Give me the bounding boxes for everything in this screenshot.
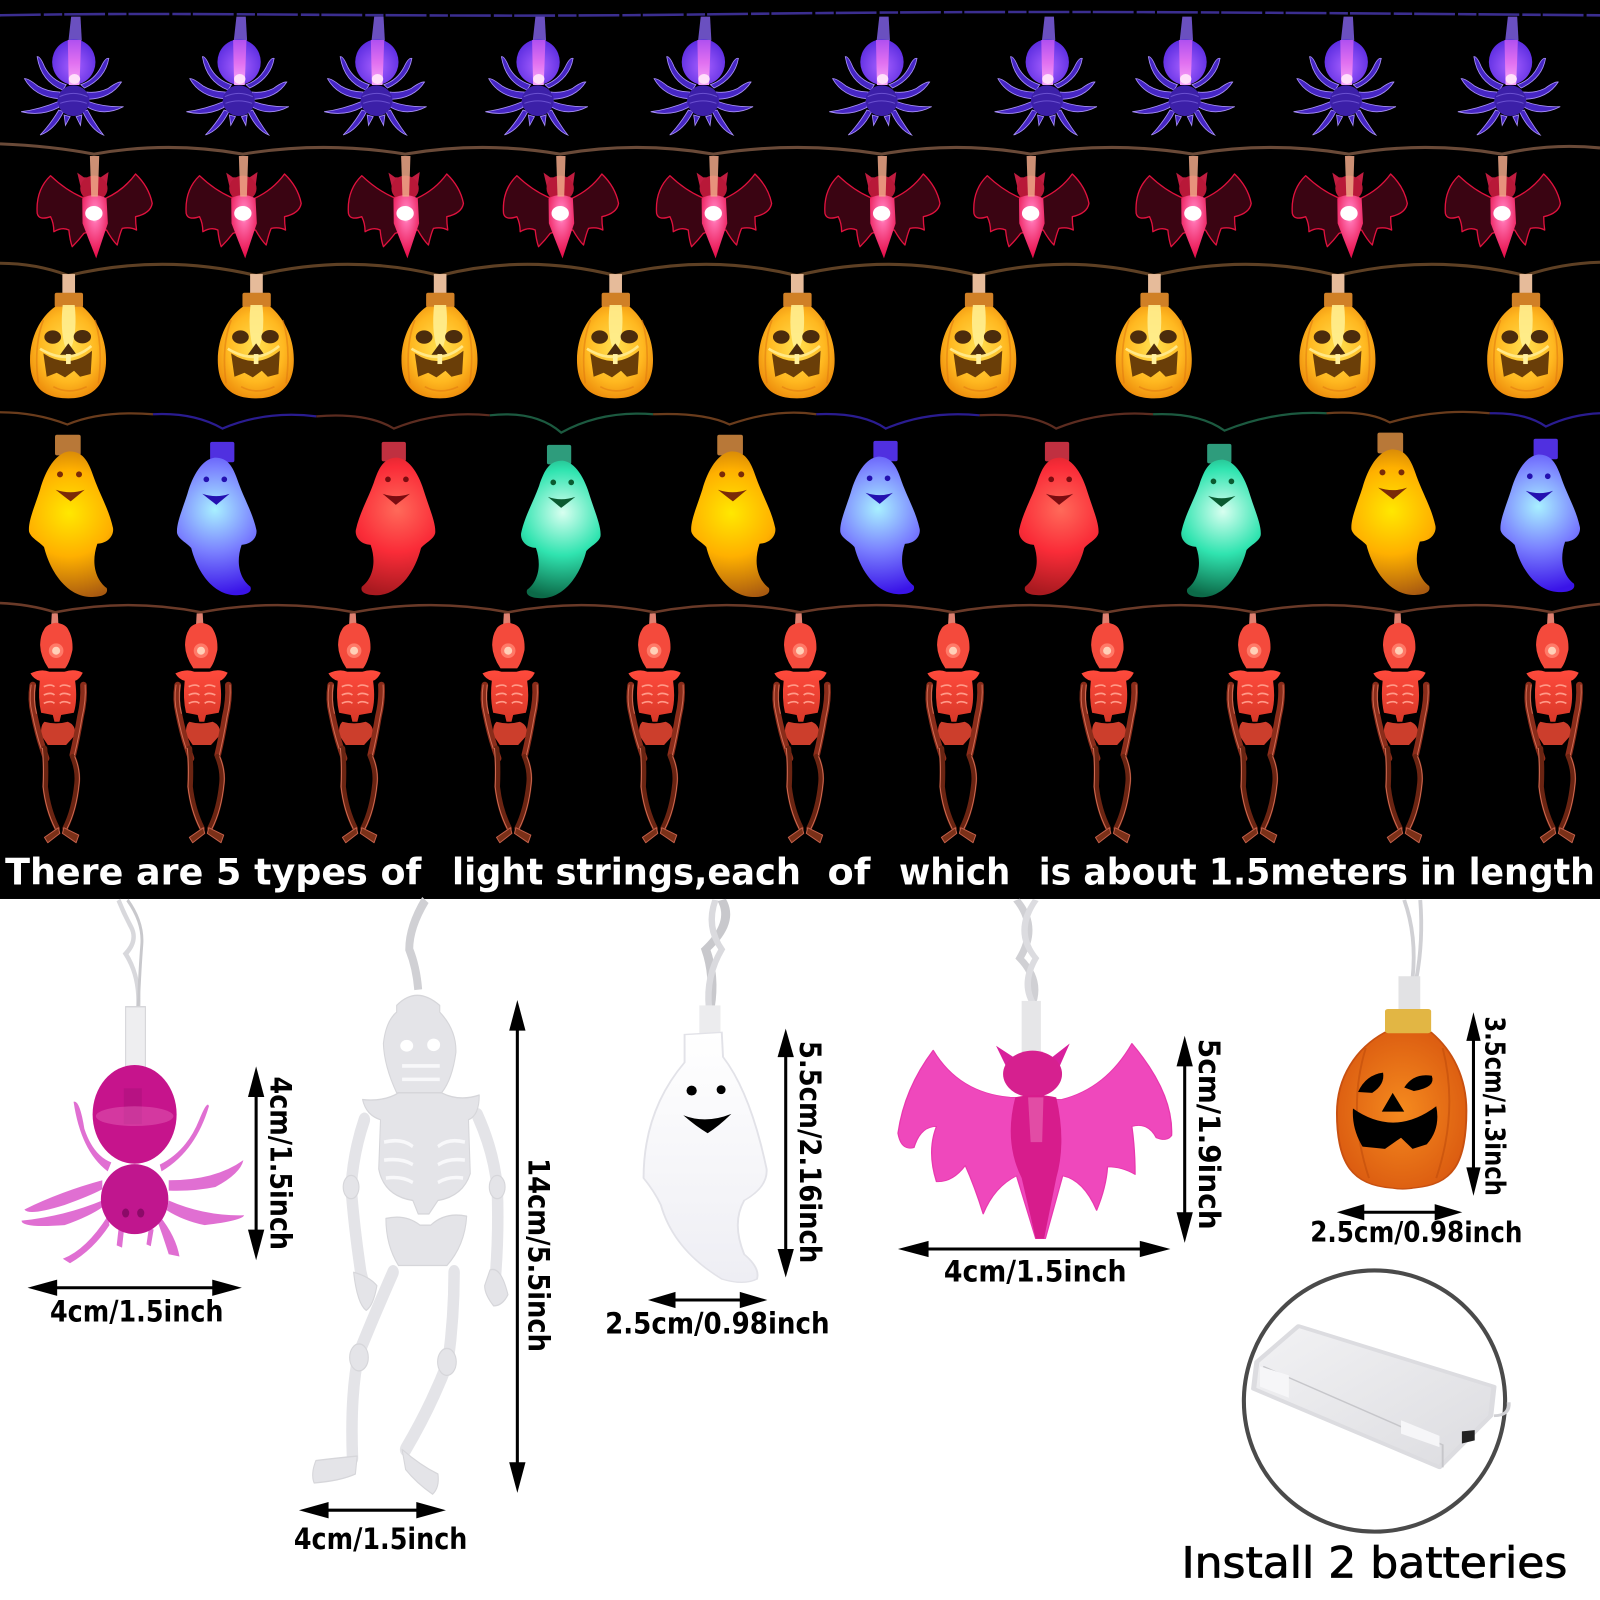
arrow: ghost width xyxy=(648,1292,767,1308)
row: purple spider string xyxy=(0,12,1600,135)
caption: There are 5 types of xyxy=(5,851,422,894)
arrow: pumpkin height xyxy=(1466,1012,1481,1196)
label: pumpkin width: 2.5cm/0.98inch xyxy=(1310,1215,1522,1249)
row: red skeleton string xyxy=(0,603,1600,843)
caption: light strings,each xyxy=(452,851,801,894)
label: pumpkin height: 3.5cm/1.3inch xyxy=(1479,1016,1511,1196)
product: pink spider xyxy=(22,900,244,1263)
row: orange pumpkin string xyxy=(0,262,1600,398)
label: spider width: 4cm/1.5inch xyxy=(50,1294,223,1328)
label: bat width: 4cm/1.5inch xyxy=(944,1255,1127,1289)
caption xyxy=(5,851,1595,894)
arrow: ghost height xyxy=(778,1029,794,1278)
product: pink bat xyxy=(898,900,1172,1239)
caption: which xyxy=(899,851,1010,894)
arrow: skeleton height xyxy=(509,1000,526,1493)
product: white ghost xyxy=(644,900,767,1282)
label: bat height: 5cm/1.9inch xyxy=(1192,1039,1226,1230)
arrow: bat width xyxy=(898,1241,1170,1257)
label: ghost height: 5.5cm/2.16inch xyxy=(793,1041,827,1263)
panel: black lit-up light strings xyxy=(0,0,1600,899)
arrow: spider width xyxy=(28,1280,242,1296)
arrow: bat height xyxy=(1177,1036,1193,1243)
product: orange pumpkin xyxy=(1337,900,1466,1189)
row: red bat string xyxy=(0,144,1600,258)
label: ghost width: 2.5cm/0.98inch xyxy=(605,1307,830,1341)
row: multicolour ghost string xyxy=(0,412,1600,598)
battery box callout xyxy=(1244,1270,1509,1532)
label: spider height: 4cm/1.5inch xyxy=(263,1077,297,1250)
circle outline xyxy=(1244,1270,1505,1532)
caption: of xyxy=(828,851,871,894)
arrow: skeleton width xyxy=(299,1502,446,1518)
icon: battery box xyxy=(1254,1326,1509,1467)
label: skeleton width: 4cm/1.5inch xyxy=(294,1522,467,1556)
label: skeleton height: 14cm/5.5inch xyxy=(522,1158,556,1352)
arrow: pumpkin width xyxy=(1337,1204,1462,1220)
product: clear skeleton xyxy=(313,900,508,1494)
battery caption: Install 2 batteries xyxy=(1182,1539,1567,1589)
arrow: spider height xyxy=(248,1066,264,1260)
